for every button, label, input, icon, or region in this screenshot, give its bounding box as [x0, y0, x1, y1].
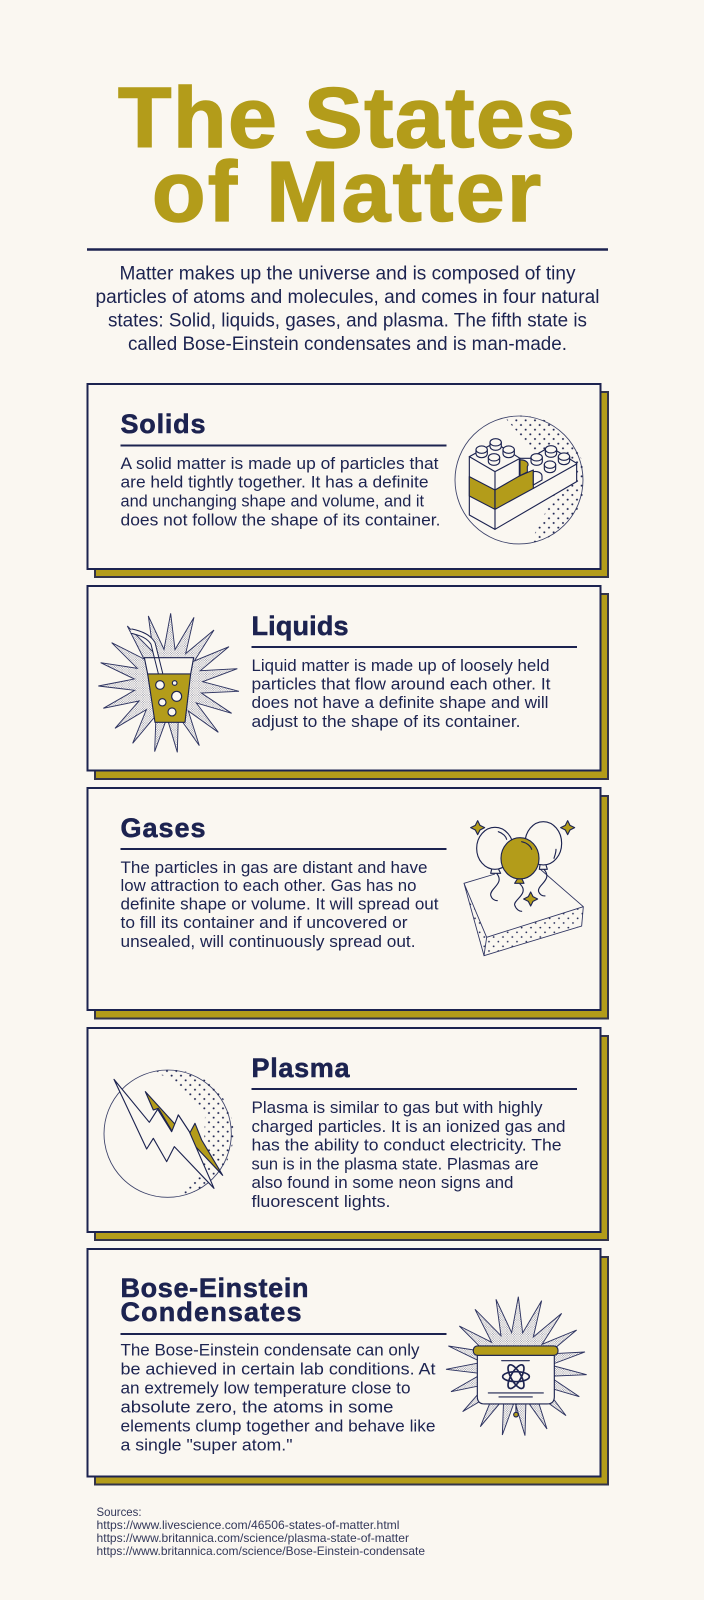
sources: https://www.britannica.com/science/Bose-Einstein-condensate — [96, 1545, 425, 1558]
text: gases: to fill its container and if uncovered or — [120, 913, 408, 932]
panel: solids — [88, 384, 608, 577]
text: bose-einstein condensates — [120, 1340, 436, 1454]
sources: Sources: — [96, 1506, 142, 1519]
panel: plasma — [88, 1028, 608, 1240]
text: liquids: adjust to the shape of its container. — [252, 712, 520, 731]
text: liquids — [252, 656, 551, 731]
icon: lightning bolts in circle — [104, 1069, 234, 1197]
icon: atom projection screen in starburst — [446, 1297, 587, 1436]
intro text — [96, 264, 600, 355]
text: liquids: particles that flow around each other. It — [252, 674, 551, 694]
heading: liquids: Liquids — [252, 611, 348, 641]
text: bose-einstein condensates: elements clump together and behave like — [120, 1416, 435, 1436]
heading: plasma: Plasma — [252, 1053, 350, 1083]
text: bose-einstein condensates: absolute zero, the atoms in some — [120, 1398, 394, 1416]
heading: gases: Gases — [120, 813, 206, 843]
panel: bose-einstein condensates — [88, 1249, 608, 1484]
title: of Matter — [152, 145, 541, 240]
text: gases: The particles in gas are distant and have — [120, 858, 428, 877]
text: solids: does not follow the shape of its container. — [120, 510, 440, 530]
text: solids: and unchanging shape and volume, and it — [120, 492, 424, 510]
intro text: states: Solid, liquids, gases, and plasma. The fifth state is — [108, 310, 587, 332]
text: plasma: sun is in the plasma state. Plasmas are — [252, 1154, 538, 1174]
text: bose-einstein condensates: an extremely low temperature close to — [120, 1378, 410, 1398]
text: bose-einstein condensates: be achieved in certain lab conditions. At — [120, 1360, 436, 1378]
panel: gases — [88, 788, 608, 1018]
heading: solids: Solids — [120, 409, 206, 439]
text: plasma: charged particles. It is an ionized gas and — [252, 1117, 566, 1136]
text: plasma: Plasma is similar to gas but with highly — [252, 1098, 543, 1117]
sources — [96, 1506, 425, 1558]
icon: building bricks — [455, 416, 585, 544]
text: solids: are held tightly together. It has a definite — [120, 472, 428, 492]
text: plasma: also found in some neon signs and — [252, 1173, 514, 1192]
text: plasma — [252, 1098, 566, 1211]
text: gases: low attraction to each other. Gas has no — [120, 876, 416, 895]
text: gases: definite shape or volume. It will spread out — [120, 894, 439, 914]
text: gases: unsealed, will continuously spread out. — [120, 932, 416, 951]
intro text: called Bose-Einstein condensates and is man-made. — [128, 334, 567, 355]
title: The States — [118, 71, 575, 166]
text: gases — [120, 858, 439, 951]
text: bose-einstein condensates: The Bose-Einstein condensate can only — [120, 1340, 420, 1360]
heading: bose-einstein condensates: Bose-Einstein — [120, 1273, 308, 1303]
sources: https://www.livescience.com/46506-states-of-matter.html — [96, 1519, 400, 1532]
text: bose-einstein condensates: a single "super atom." — [120, 1436, 292, 1454]
text: plasma: has the ability to conduct electricity. The — [252, 1136, 562, 1154]
text: solids: A solid matter is made up of particles that — [120, 454, 439, 473]
text: plasma: fluorescent lights. — [252, 1192, 390, 1211]
icon: balloons on a block — [464, 821, 583, 956]
text: solids — [120, 454, 440, 530]
intro text: particles of atoms and molecules, and comes in four natural — [96, 287, 600, 308]
heading: bose-einstein condensates: Condensates — [120, 1297, 302, 1327]
text: liquids: Liquid matter is made up of loosely held — [252, 656, 550, 675]
text: liquids: does not have a definite shape and will — [252, 693, 548, 712]
panel: liquids — [88, 586, 608, 779]
title — [118, 71, 575, 240]
heading: bose-einstein condensates — [120, 1273, 308, 1327]
sources: https://www.britannica.com/science/plasma-state-of-matter — [96, 1532, 409, 1545]
studs — [476, 439, 570, 473]
intro text: Matter makes up the universe and is composed of tiny — [120, 264, 576, 284]
icon: drink glass in starburst — [98, 613, 239, 752]
